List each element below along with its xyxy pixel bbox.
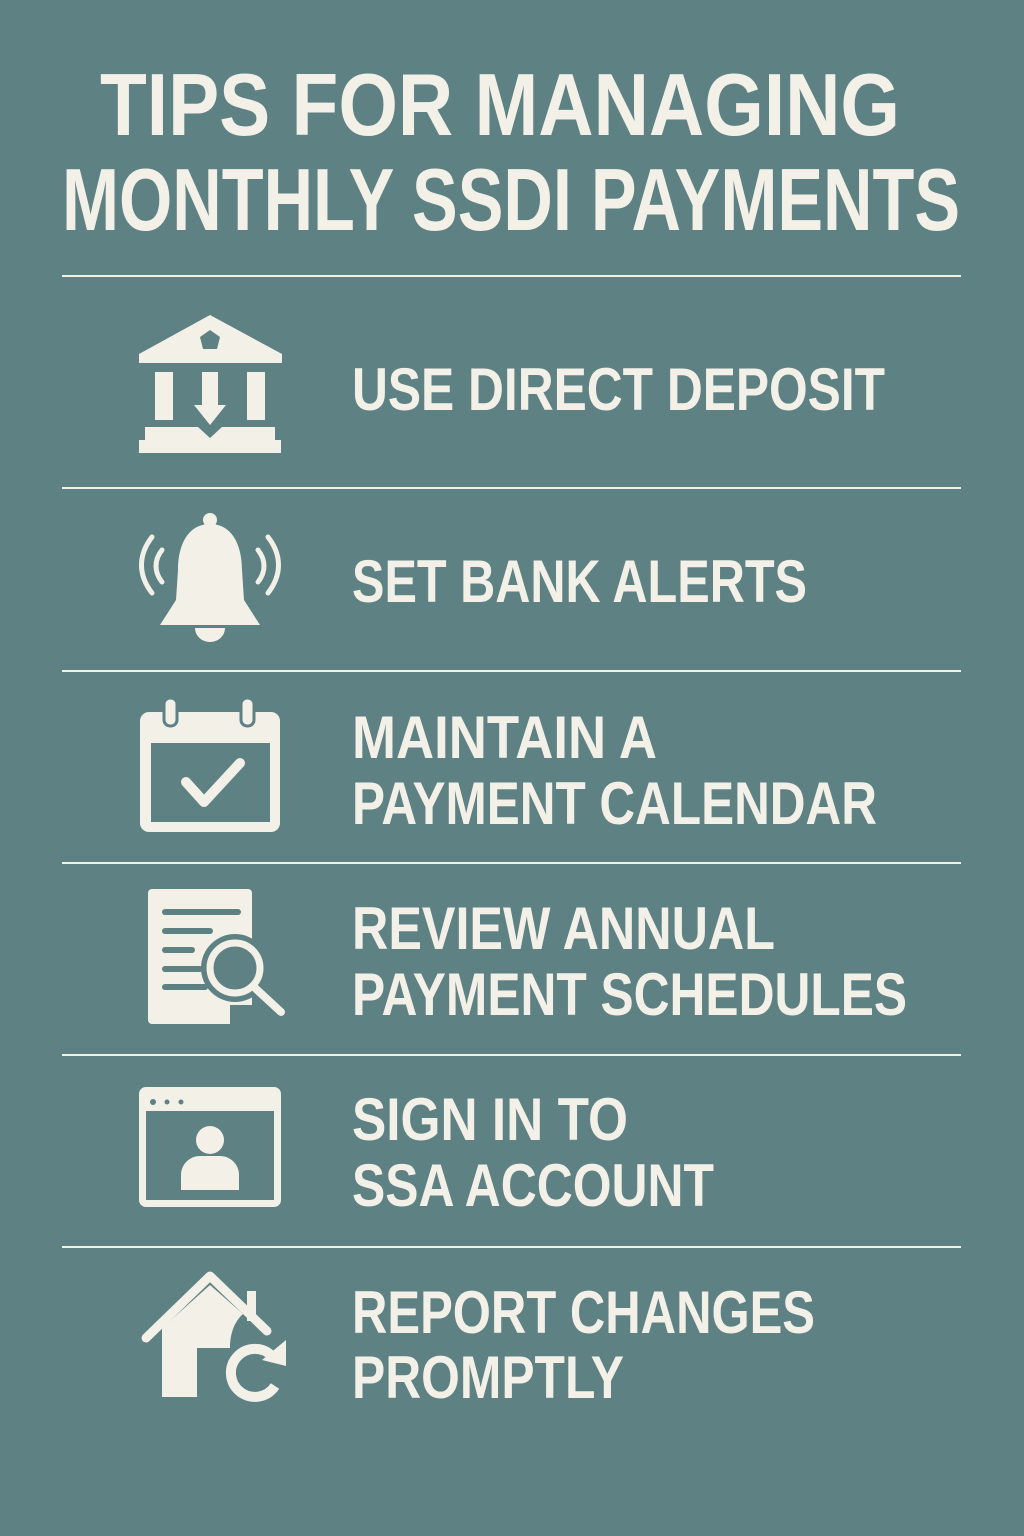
title: TIPS FOR MANAGING: [100, 55, 900, 154]
panel: report changes: PROMPTLY: [352, 1344, 624, 1411]
panel: payment calendar: PAYMENT CALENDAR: [352, 770, 877, 837]
text: set bank alerts: SET BANK ALERTS: [352, 548, 807, 615]
icon: bell: [142, 513, 278, 642]
icon: bank: [139, 315, 282, 453]
panel: report changes: [146, 1276, 815, 1411]
text: sign in to ssa account: SIGN IN TO: [352, 1086, 628, 1153]
panel: ssa account: SSA ACCOUNT: [352, 1152, 714, 1219]
icon: browser with user: [139, 1087, 281, 1207]
text: review annual payment schedules: REVIEW ANNUAL: [352, 895, 775, 962]
icon: document with magnifier: [148, 889, 281, 1030]
panel: payment calendar: [140, 698, 877, 837]
panel: review schedules: [148, 889, 907, 1030]
title: [62, 55, 960, 249]
text: report changes promptly: REPORT CHANGES: [352, 1279, 815, 1346]
panel: review schedules: PAYMENT SCHEDULES: [352, 961, 907, 1028]
icon: calendar: [140, 698, 280, 832]
text: use direct deposit: USE DIRECT DEPOSIT: [352, 356, 885, 423]
icon: house with refresh: [146, 1276, 286, 1397]
panel: bank alerts: [142, 513, 807, 642]
panel: ssa account: [139, 1086, 714, 1219]
panel: direct deposit: [139, 315, 885, 453]
text: maintain a payment calendar: MAINTAIN A: [352, 704, 657, 771]
